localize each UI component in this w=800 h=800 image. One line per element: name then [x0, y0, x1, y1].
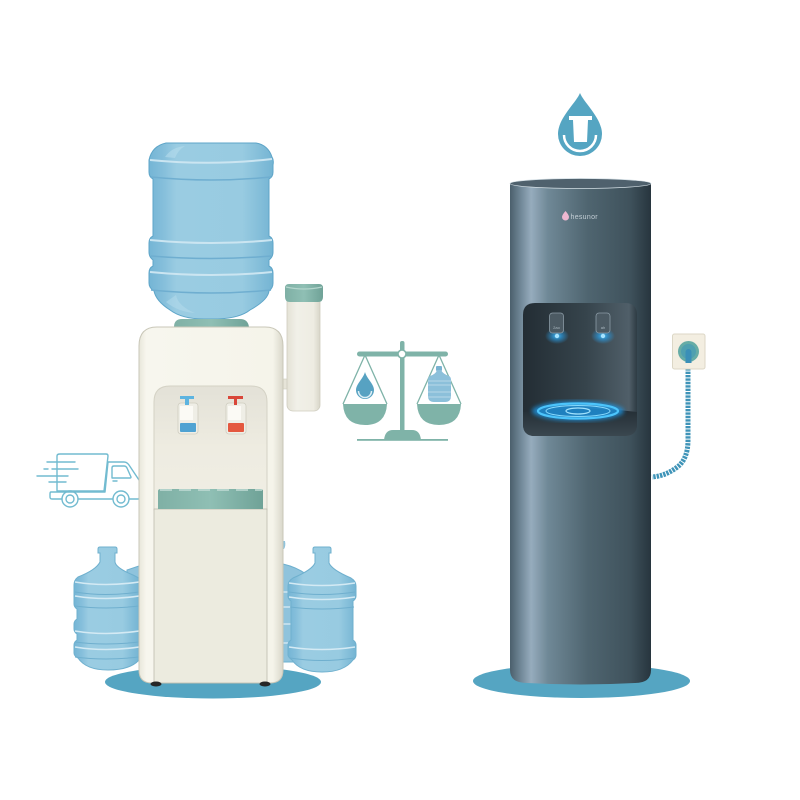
icon: water drop with filter	[558, 93, 602, 156]
spare bottle: front right	[288, 547, 356, 672]
scale: water drop	[356, 372, 374, 399]
spout: right: ah	[601, 325, 605, 330]
drip tray	[158, 489, 263, 509]
lower door panel	[154, 509, 267, 683]
cooler feet	[150, 682, 270, 686]
drip shelf	[523, 408, 637, 436]
control recess	[154, 386, 267, 510]
brand logo: hesunor	[570, 214, 598, 221]
power cord	[652, 358, 688, 477]
scale: water jug	[428, 366, 451, 402]
icon: balance scale	[343, 341, 461, 441]
hot tap	[226, 396, 246, 434]
cooler body	[139, 327, 283, 686]
bottle collar	[174, 319, 249, 327]
spare bottle: back left	[127, 566, 139, 650]
filter cartridge	[282, 284, 323, 411]
floor shadow: dispenser	[473, 664, 690, 698]
dispensing niche	[523, 303, 637, 436]
icon: delivery truck	[37, 454, 140, 507]
spout: left: 2ao	[553, 325, 561, 330]
cooler bottle: large water jug	[149, 143, 273, 319]
spare bottle: front left	[74, 547, 139, 670]
glowing ring	[532, 401, 624, 421]
tower top cap	[510, 178, 651, 188]
cold tap	[178, 396, 198, 434]
spare bottle: back right	[283, 541, 307, 662]
brand logo	[562, 211, 598, 221]
floor shadow: cooler	[105, 666, 321, 698]
wall socket	[672, 334, 705, 369]
water dispenser tower	[510, 178, 651, 684]
